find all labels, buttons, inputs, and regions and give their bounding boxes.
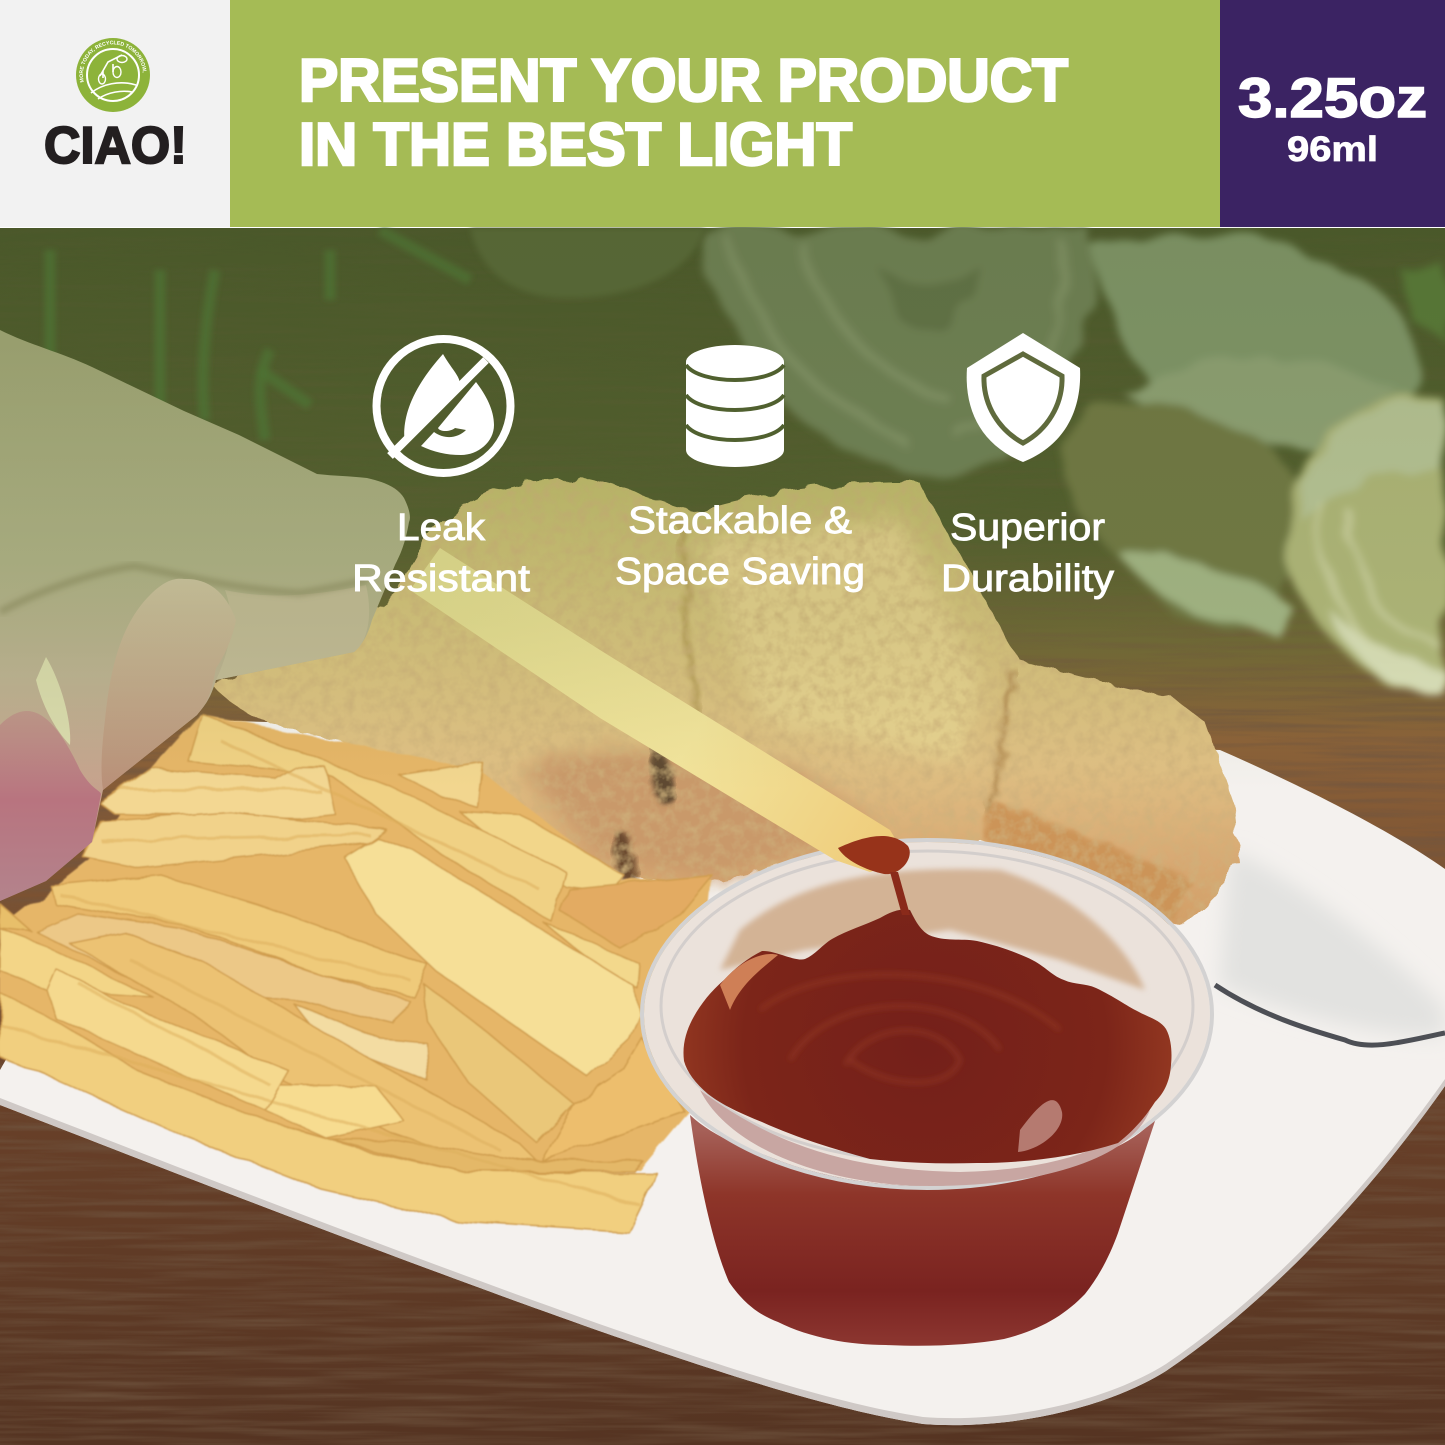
- lip seen below ketchup: [700, 1090, 1150, 1186]
- headline text: IN THE BEST LIGHT: [299, 111, 852, 178]
- fried chicken: [211, 478, 1240, 933]
- label: stackable: Stackable &: [628, 500, 852, 542]
- fingernail: [36, 657, 70, 745]
- ketchup surface: [683, 909, 1171, 1163]
- size badge: [1220, 0, 1445, 227]
- label: leak resistant: Resistant: [352, 558, 530, 600]
- ketchup edge glint: [720, 954, 778, 1010]
- chicken seen through the cup: [720, 869, 1145, 990]
- thumb: [102, 579, 236, 790]
- plastic portion cup with ketchup: [642, 840, 1212, 1346]
- feature: stackable: [615, 345, 865, 593]
- label: leak resistant: [352, 507, 530, 600]
- label: stackable: Space Saving: [615, 551, 865, 593]
- label: durability: Durability: [941, 558, 1114, 600]
- size badge: 96ml: [1287, 130, 1378, 169]
- headline text: [299, 47, 1068, 178]
- icon: shield: [967, 333, 1080, 462]
- icon: stacked cups: [686, 345, 784, 467]
- logo badge: MORE TODAY, RECYCLED TOMORROW,: [79, 40, 146, 82]
- feature: leak resistant: [352, 339, 530, 600]
- feature: durability: [941, 333, 1114, 600]
- see-through cup interior: [644, 842, 1210, 1186]
- flowers: [700, 228, 1445, 697]
- green photo overlay: [0, 228, 1445, 798]
- label: stackable: [615, 500, 865, 593]
- pink fingertip: [0, 711, 101, 901]
- ketchup highlight: [1018, 1100, 1062, 1152]
- icon: crossed-out droplet: [376, 339, 510, 473]
- fry dipped in ketchup: [410, 548, 910, 915]
- marble vein: [1215, 985, 1445, 1045]
- inner rim highlight: [661, 851, 1193, 1161]
- finger crease: [0, 566, 368, 612]
- logo badge: [76, 38, 150, 112]
- label: durability: [941, 507, 1114, 600]
- label: leak resistant: Leak: [397, 507, 486, 549]
- french fries: [0, 714, 712, 1232]
- label: durability: Superior: [950, 507, 1105, 549]
- size badge: 3.25oz: [1238, 66, 1427, 129]
- cup rim: [642, 840, 1212, 1188]
- logo panel: [0, 0, 230, 227]
- hand holding a fry: [0, 330, 410, 901]
- ketchup strand: [890, 872, 910, 915]
- lower fingertip: [216, 585, 369, 680]
- white marble plate: [0, 720, 1445, 1425]
- ketchup on fry tip: [838, 836, 910, 874]
- headline text: PRESENT YOUR PRODUCT: [299, 47, 1068, 114]
- ketchup swirl: [760, 975, 1060, 1082]
- bowl and leaves: [50, 228, 705, 440]
- cup body: [690, 1115, 1157, 1346]
- logo wordmark: CIAO!: [44, 117, 187, 175]
- headline banner: [230, 0, 1220, 227]
